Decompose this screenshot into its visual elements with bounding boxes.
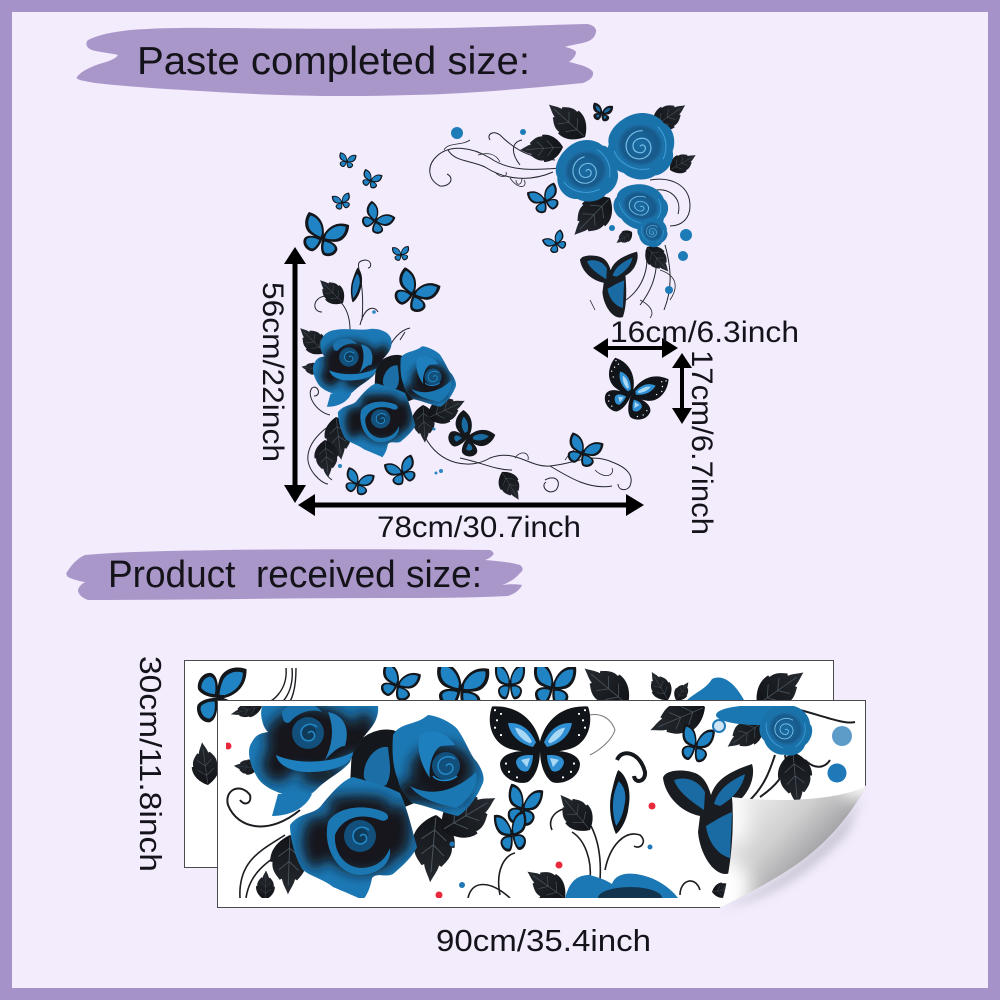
leaves lower	[292, 273, 527, 505]
brush banner	[77, 24, 596, 96]
dimension label: 90cm: 90cm/35.4inch	[436, 923, 651, 958]
back sheet artwork	[192, 667, 804, 785]
heading: product received size: Product received size:	[108, 554, 482, 596]
decal: lower left rose corner	[292, 152, 670, 505]
red dots	[224, 742, 656, 898]
decal: upper right rose corner	[430, 93, 700, 318]
dimension: 78cm width arrow	[298, 494, 644, 544]
sticker sheet: back	[184, 655, 834, 868]
dimension: 78cm width arrow: 78cm/30.7inch	[377, 511, 581, 544]
dimension: 56cm height arrow	[256, 247, 306, 503]
leaves	[230, 706, 812, 898]
peeled corner	[720, 786, 866, 908]
dimension: 17cm height arrow	[672, 350, 718, 535]
leaves upper	[519, 93, 700, 278]
butterflies	[490, 706, 753, 874]
dimension: 17cm height arrow: 17cm/6.7inch	[685, 350, 718, 535]
dimension: 16cm width arrow	[593, 316, 799, 358]
vines	[227, 710, 855, 898]
heading: paste completed size	[77, 24, 596, 96]
heading: paste completed size: Paste completed size:	[137, 40, 530, 83]
front sheet artwork	[226, 706, 856, 898]
roses	[249, 706, 812, 898]
sticker sheet: front	[218, 686, 866, 910]
blue roses lower	[313, 329, 456, 457]
blue dots	[338, 310, 443, 474]
dimension label: 30cm: 30cm/11.8inch	[133, 656, 168, 872]
butterflies lower	[297, 152, 670, 498]
butterflies upper	[526, 103, 638, 318]
heading: product received size	[66, 549, 523, 600]
brush banner	[66, 549, 523, 600]
vine swirls upper	[430, 133, 690, 318]
dimension: 16cm width arrow: 16cm/6.3inch	[610, 316, 799, 349]
bottom rose	[565, 874, 678, 898]
dimension: 56cm height arrow: 56cm/22inch	[256, 282, 289, 462]
vine swirls lower	[308, 260, 631, 492]
blue balls	[451, 127, 692, 294]
blue roses upper	[549, 113, 674, 253]
blue balls	[450, 720, 852, 888]
